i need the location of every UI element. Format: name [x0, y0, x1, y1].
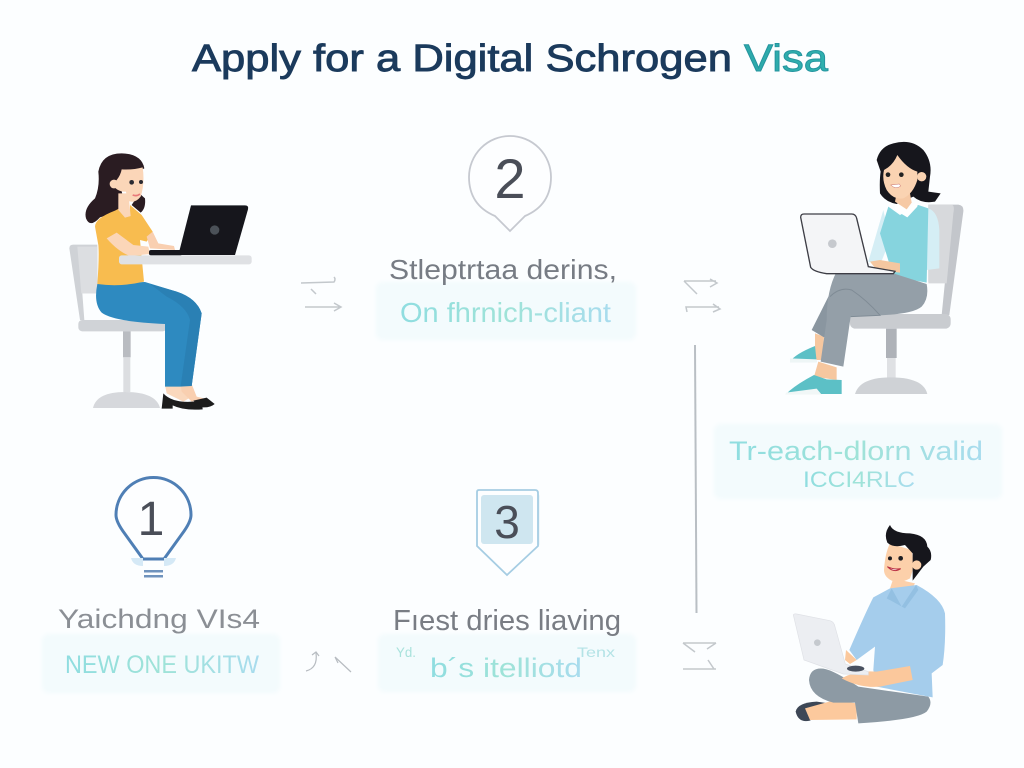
step 3: text panel: Tenx: [577, 644, 615, 660]
title: Apply for a Digital Schrogen Visa: [192, 38, 829, 80]
step 2: text panel: Stleptrtaa derins,: [389, 254, 617, 285]
step 3: text panel: [378, 605, 636, 692]
step 3: tag badge: [477, 490, 539, 575]
right text panel: ICCI4RLC: [803, 467, 915, 492]
arrow: step 2 to right figure: [684, 279, 720, 312]
illustration: woman in teal vest on chair with white laptop: [785, 142, 963, 395]
right text panel: Tr-each-dlorn valid: [729, 436, 983, 466]
step 2: pin badge: [469, 136, 551, 231]
connector: vertical line: [695, 345, 696, 613]
step 1: text panel: NEW ONE UKITW: [65, 651, 259, 679]
step 1: text panel: [42, 604, 280, 693]
step 3: text panel: Yd.: [396, 644, 416, 660]
arrow: lower left pair: [306, 652, 351, 672]
step 1: text panel: Yaichdng VIs4: [58, 604, 260, 634]
step 2: text panel: On fhrnich-cliant: [400, 297, 611, 328]
illustration: man in blue shirt sitting cross-legged with laptop: [793, 525, 945, 723]
step 3: tag badge: 3: [494, 496, 520, 548]
illustration: woman in yellow at desk with black laptop: [69, 153, 252, 410]
step 2: pin badge: 2: [494, 147, 526, 210]
step 2: text panel: [376, 254, 636, 340]
arrow: lower right pair: [683, 643, 716, 669]
step 3: text panel: b´s itelliotd: [430, 653, 582, 683]
arrow: step 2 to woman: [301, 277, 341, 311]
step 1: bulb badge: 1: [138, 493, 164, 546]
right text panel: [714, 424, 1002, 499]
step 1: bulb badge: [116, 478, 191, 578]
step 3: text panel: Fıest dries liaving: [393, 605, 621, 637]
